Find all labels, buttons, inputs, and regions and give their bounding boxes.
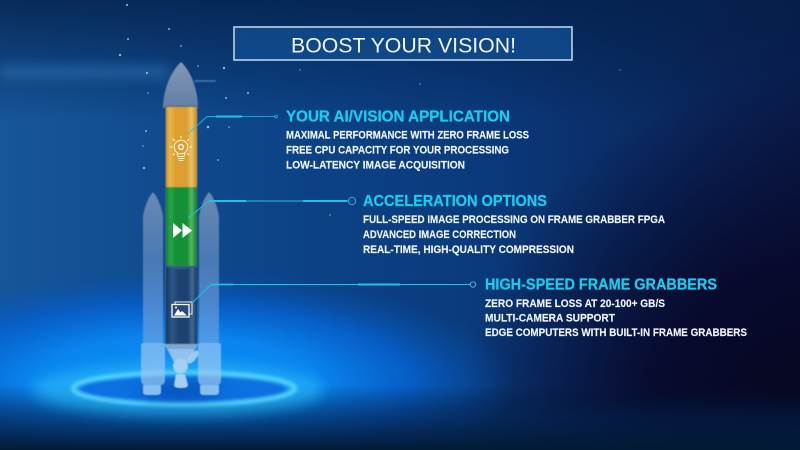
right booster (198, 192, 221, 395)
upper body (165, 106, 198, 346)
navy stage (166, 267, 197, 346)
connector: application (188, 115, 277, 134)
heading: HIGH-SPEED FRAME GRABBERS (485, 276, 717, 294)
section: your AI/vision application (286, 108, 529, 172)
section: acceleration options (363, 193, 665, 256)
starfield (119, 4, 621, 216)
bullet lines: MULTI-CAMERA SUPPORT (485, 312, 616, 324)
title box (234, 27, 572, 60)
orange stage (166, 107, 197, 188)
bullet lines: FULL-SPEED IMAGE PROCESSING ON FRAME GRABBER FPGA (363, 214, 665, 226)
connector: frame grabbers (192, 282, 476, 303)
icon: image gallery (172, 302, 192, 317)
connector: acceleration (188, 197, 356, 218)
nose cone (163, 62, 198, 108)
bullet lines (286, 130, 529, 172)
heading: ACCELERATION OPTIONS (363, 193, 547, 210)
landing pad glow ring (33, 363, 323, 415)
heading: YOUR AI/VISION APPLICATION (286, 108, 510, 126)
icon: fast forward (173, 223, 192, 238)
bullet lines: FREE CPU CAPACITY FOR YOUR PROCESSING (286, 144, 509, 156)
bullet lines (485, 298, 747, 339)
bullet lines: ADVANCED IMAGE CORRECTION (363, 229, 516, 241)
rocket (141, 62, 221, 395)
main engine (165, 345, 201, 388)
section: high-speed frame grabbers (485, 276, 747, 339)
bullet lines (363, 214, 665, 256)
bullet lines: EDGE COMPUTERS WITH BUILT-IN FRAME GRABBERS (485, 327, 747, 339)
bullet lines: ZERO FRAME LOSS AT 20-100+ GB/S (485, 298, 665, 310)
icon: light bulb (170, 136, 192, 160)
bullet lines: MAXIMAL PERFORMANCE WITH ZERO FRAME LOSS (286, 130, 529, 142)
bullet lines: REAL-TIME, HIGH-QUALITY COMPRESSION (363, 244, 574, 256)
title: BOOST YOUR VISION! (291, 34, 516, 58)
green stage (166, 187, 197, 266)
lower collar (164, 344, 198, 349)
bullet lines: LOW-LATENCY IMAGE ACQUISITION (286, 160, 465, 172)
left booster (141, 192, 165, 395)
